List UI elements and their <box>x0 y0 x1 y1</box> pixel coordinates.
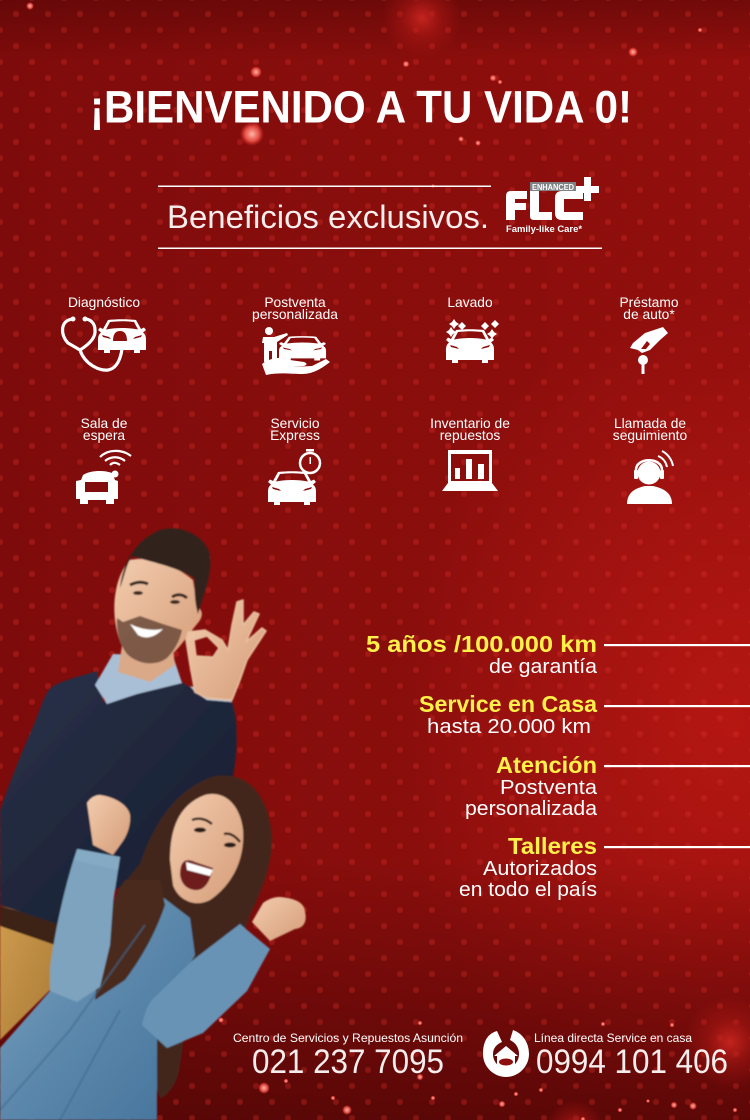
label: Express <box>270 428 320 443</box>
contact: service center <box>233 1031 463 1081</box>
item: service en casa: hasta 20.000 km <box>427 716 591 738</box>
item: atencion: personalizada <box>465 798 598 820</box>
logo: FLC enhanced <box>506 177 599 235</box>
icon: clean car with sparkles <box>446 319 499 363</box>
icon: car with stopwatch <box>268 449 320 505</box>
photo: man and woman celebrating <box>0 528 306 1120</box>
benefit: Servicio Express <box>268 416 320 505</box>
item: garantia: de garantía <box>489 656 598 678</box>
item: talleres <box>459 833 750 901</box>
woman <box>0 775 306 1120</box>
icon: hand with car key <box>630 327 668 374</box>
label: Diagnóstico <box>68 295 140 310</box>
man <box>0 528 266 1040</box>
label: Sala de <box>81 416 128 431</box>
icon: person, car and hand <box>262 327 330 375</box>
benefit: Llamada de seguimiento <box>613 416 688 504</box>
benefit: Sala de espera <box>76 416 131 504</box>
label: Préstamo <box>619 295 679 310</box>
icon: call agent with headset <box>627 451 673 504</box>
icon: armchair with wifi <box>76 451 131 504</box>
benefit: Préstamo de auto <box>619 295 679 374</box>
item: service en casa: Service en Casa <box>419 691 597 717</box>
benefit: Inventario de repuestos <box>430 416 510 491</box>
contact: service center: Centro de Servicios y Repuestos Asunción <box>233 1031 463 1045</box>
item: atencion <box>465 752 750 820</box>
subtitle text: Beneficios exclusivos. <box>167 199 489 235</box>
contact: direct line: Línea directa Service en casa <box>534 1031 692 1045</box>
guarantee list <box>366 631 750 901</box>
label: de auto* <box>623 307 675 322</box>
contact: service center: 021 237 7095 <box>252 1043 444 1081</box>
icon: Kia service at home <box>483 1030 529 1077</box>
item: garantia <box>366 631 750 678</box>
label: espera <box>83 428 125 443</box>
item: talleres: Talleres <box>508 833 597 859</box>
label: personalizada <box>252 307 338 322</box>
benefit: Lavado <box>446 295 499 363</box>
label: repuestos <box>440 428 500 443</box>
label: Lavado <box>447 295 493 310</box>
label: Llamada de <box>614 416 686 431</box>
benefit: Diagnóstico <box>63 295 146 370</box>
item: service en casa <box>419 691 750 738</box>
label: seguimiento <box>613 428 688 443</box>
item: talleres: en todo el país <box>459 879 597 901</box>
item: atencion: Postventa <box>500 777 598 799</box>
label: Inventario de <box>430 416 510 431</box>
item: talleres: Autorizados <box>483 858 597 880</box>
title: ¡BIENVENIDO A TU VIDA 0! <box>90 82 632 132</box>
item: garantia: 5 años /100.000 km <box>366 631 597 657</box>
label: Servicio <box>270 416 320 431</box>
benefit: Postventa personalizada <box>252 295 338 375</box>
logo: FLC enhanced: Family-like Care* <box>506 224 582 235</box>
icon: stethoscope and car <box>63 316 146 370</box>
contact: direct line: 0994 101 406 <box>536 1043 728 1081</box>
label: Postventa <box>264 295 326 310</box>
icon: laptop with bars <box>442 450 498 491</box>
item: atencion: Atención <box>496 752 597 778</box>
logo: FLC enhanced: ENHANCED <box>532 183 574 192</box>
